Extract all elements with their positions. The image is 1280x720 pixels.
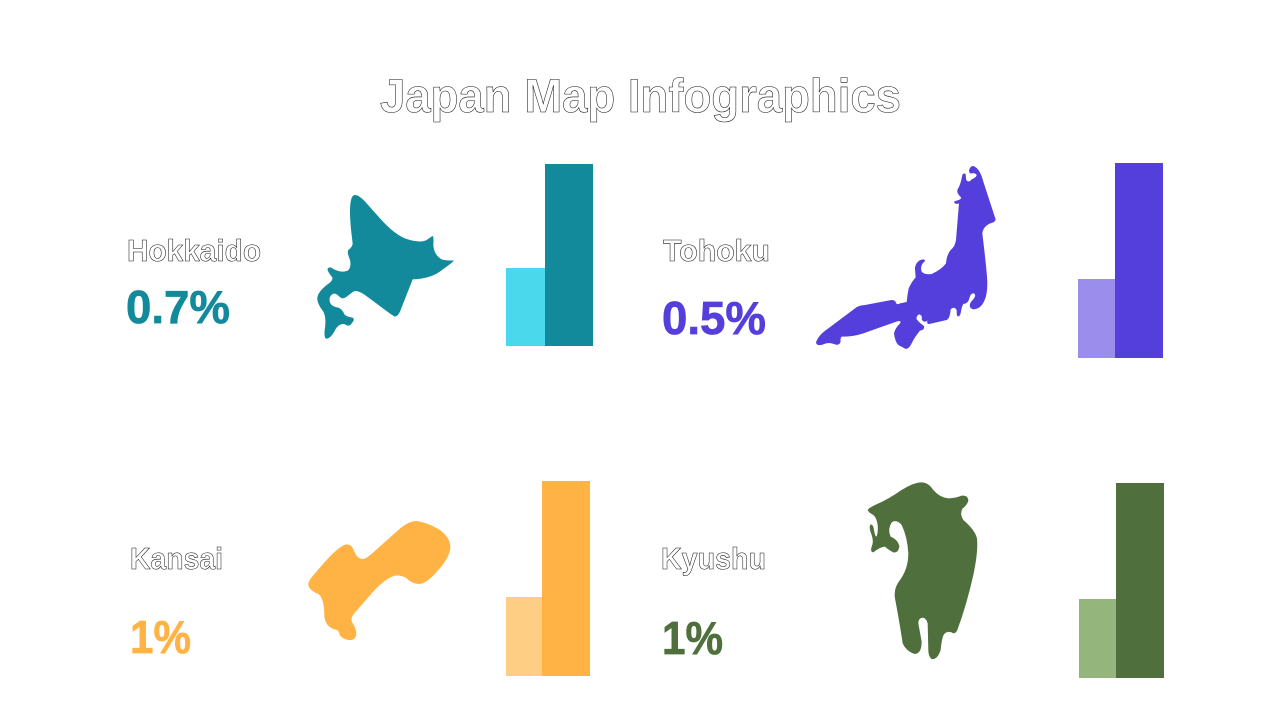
Hokkaido value: 0.7% (126, 281, 230, 333)
Kyushu label: Kyushu (661, 541, 766, 576)
bar chart: Hokkaido (506, 164, 593, 346)
icon: Hokkaido map (317, 195, 454, 339)
panel: Kansai (130, 481, 590, 676)
icon: Kansai map (308, 521, 450, 640)
icon: Kyushu map (868, 482, 977, 659)
panel: Tohoku (662, 163, 1163, 358)
title: Japan Map Infographics (380, 69, 901, 122)
Kansai value: 1% (130, 611, 191, 663)
icon: Tohoku map (816, 166, 996, 349)
panel: Hokkaido (126, 164, 593, 346)
Hokkaido label: Hokkaido (127, 233, 261, 268)
panel: Kyushu (661, 482, 1164, 678)
Tohoku value: 0.5% (662, 292, 766, 344)
bar chart: Kyushu (1079, 483, 1164, 678)
bar chart: Kansai (506, 481, 590, 676)
Tohoku label: Tohoku (663, 233, 770, 268)
Kyushu value: 1% (662, 612, 723, 664)
bar chart: Tohoku (1078, 163, 1163, 358)
Kansai label: Kansai (130, 541, 223, 576)
